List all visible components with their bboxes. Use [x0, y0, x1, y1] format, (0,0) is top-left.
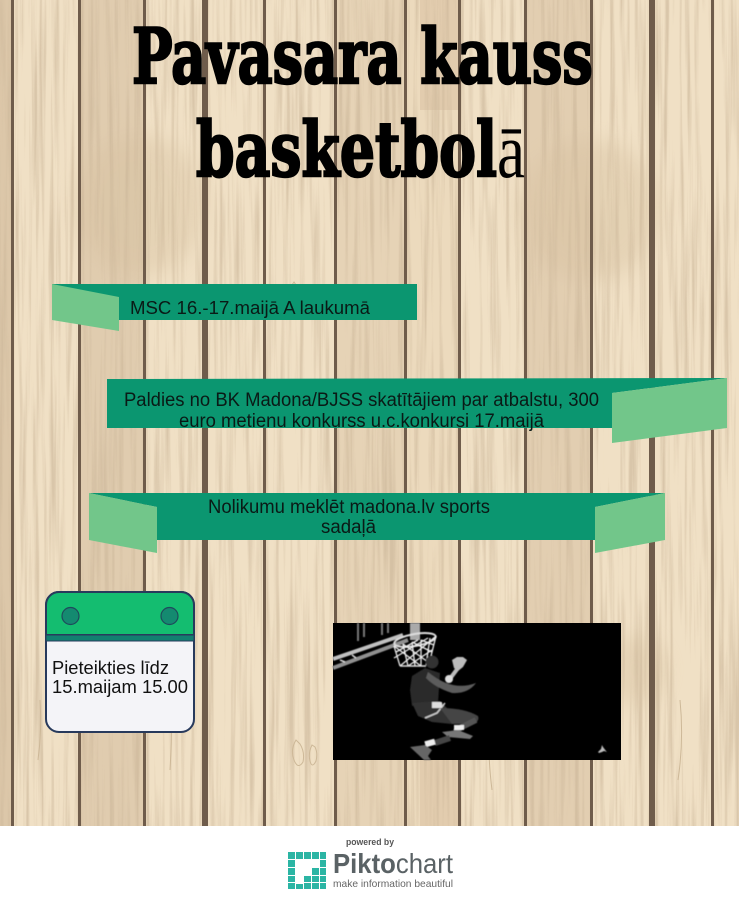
- ribbon: thanks and contests: Paldies no BK Madona/BJSS skatītājiem par atbalstu, 300: [124, 390, 599, 411]
- title line 2: basketbol: [196, 105, 497, 194]
- title line 2: ā: [497, 109, 525, 195]
- calendar: registration deadline: Pieteikties līdz: [52, 657, 169, 678]
- ribbon: location and date: MSC 16.-17.maijā A laukumā: [130, 297, 371, 318]
- calendar ring right: [161, 608, 178, 624]
- photo: basketball player dunking: [333, 623, 621, 760]
- ribbon: location and date: [52, 284, 417, 331]
- ribbon: rules: sadaļā: [321, 517, 376, 538]
- ribbon: rules: [89, 493, 665, 553]
- calendar: registration deadline: [46, 592, 194, 732]
- ribbon: thanks and contests: euro metienu konkurss u.c.konkursi 17.maijā: [179, 411, 544, 432]
- calendar: registration deadline: 15.maijam 15.00: [52, 676, 188, 697]
- ribbon: rules: Nolikumu meklēt madona.lv sports: [208, 497, 490, 518]
- footer: Piktochart branding: [0, 826, 739, 900]
- Piktochart logo mark: [288, 852, 326, 889]
- title: [132, 12, 593, 195]
- calendar ring left: [62, 608, 79, 624]
- title line 1: Pavasara kauss: [132, 12, 593, 101]
- powered by label: powered by: [346, 837, 395, 848]
- tagline: make information beautiful: [333, 878, 453, 890]
- Piktochart wordmark: Piktochart: [333, 848, 453, 879]
- ribbon: thanks and contests: [107, 378, 727, 443]
